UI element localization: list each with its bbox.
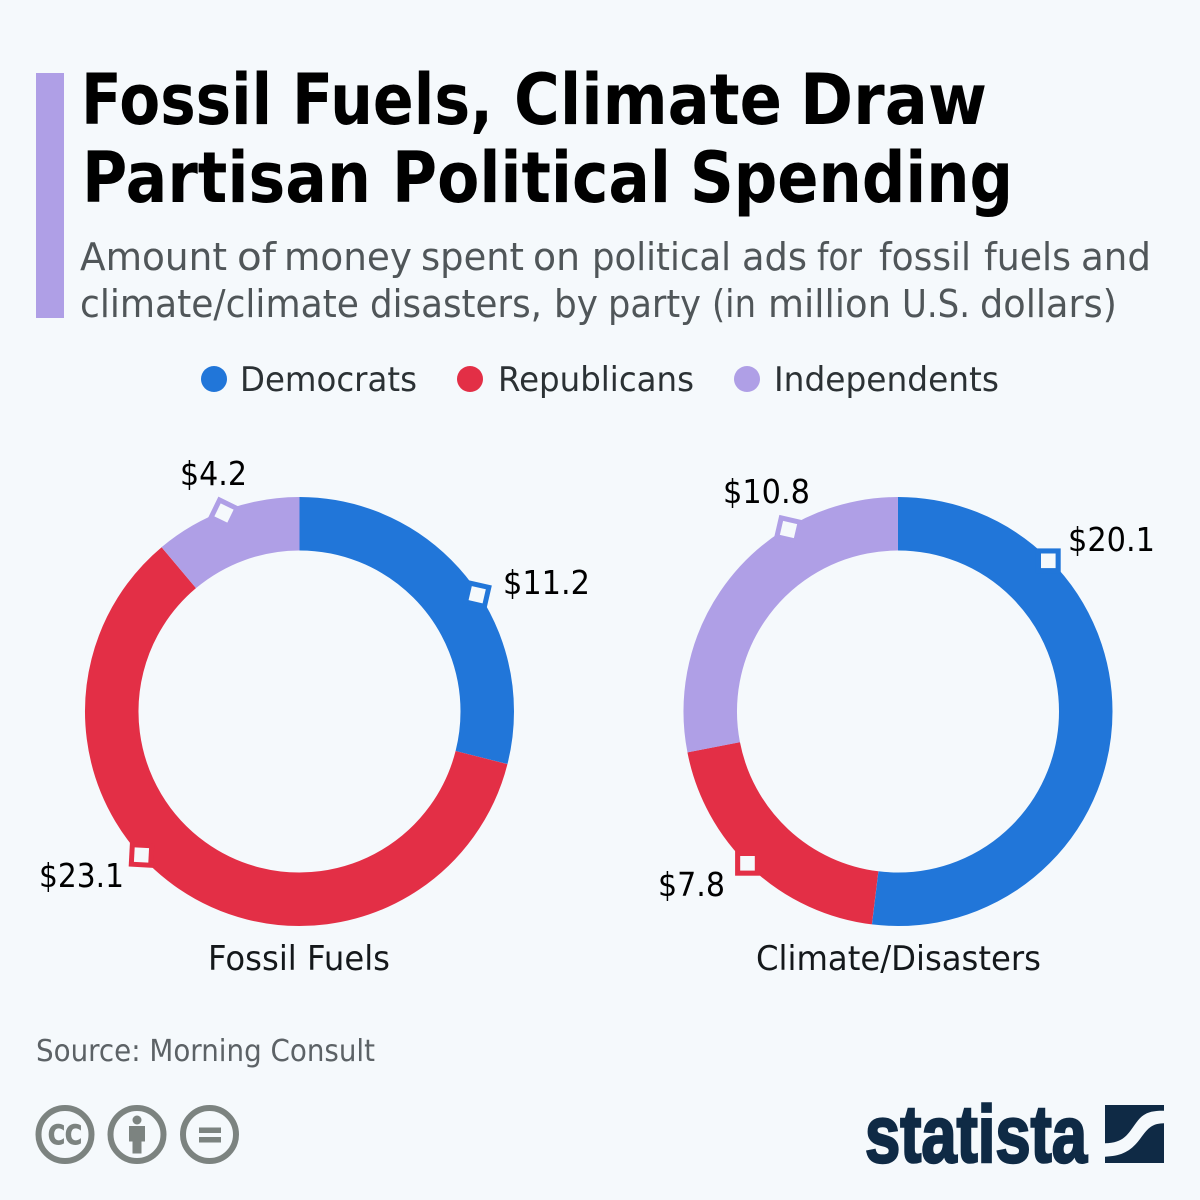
subtitle: political	[592, 235, 731, 279]
subtitle: by	[554, 282, 598, 326]
title: Draw	[800, 59, 987, 141]
legend	[201, 360, 999, 400]
title: Partisan	[82, 137, 371, 219]
subtitle: for	[817, 235, 862, 279]
donut chart: climate/disasters: $20.1	[1068, 520, 1155, 559]
icon: creative commons licence	[38, 1108, 236, 1161]
legend: Republicans	[498, 360, 694, 400]
subtitle: million	[768, 282, 891, 326]
donut chart: fossil fuels	[35, 447, 590, 979]
subtitle: of	[237, 235, 278, 279]
donut chart: climate/disasters: $7.8	[658, 865, 725, 904]
subtitle: on	[533, 235, 580, 279]
subtitle: party	[608, 282, 701, 326]
donut chart: fossil fuels: $11.2	[503, 563, 590, 602]
title	[81, 59, 1013, 219]
subtitle: fuels	[984, 235, 1071, 279]
subtitle	[80, 235, 1151, 326]
donut chart: fossil fuels: $23.1	[39, 856, 124, 895]
icon: creative commons licence: CC	[48, 1120, 82, 1151]
donut chart: climate/disasters	[658, 472, 1155, 979]
subtitle: spent	[421, 235, 524, 279]
subtitle: fossil	[879, 235, 971, 279]
subtitle: Amount	[80, 235, 227, 279]
subtitle: (in	[712, 282, 756, 326]
subtitle: dollars)	[980, 282, 1117, 326]
legend: Independents	[774, 360, 999, 400]
subtitle: disasters,	[370, 282, 542, 326]
subtitle: U.S.	[902, 282, 970, 326]
title: Climate	[514, 59, 782, 141]
source: Source: Morning Consult	[36, 1034, 375, 1069]
title: Political	[392, 137, 671, 219]
donut chart: climate/disasters: $10.8	[723, 472, 810, 511]
donut chart: climate/disasters: Climate/Disasters	[756, 939, 1041, 979]
subtitle: money	[284, 235, 412, 279]
title: Spending	[690, 137, 1013, 219]
donut chart: fossil fuels: $4.2	[180, 454, 247, 493]
title: Fossil	[81, 59, 272, 141]
statista logo: statista	[865, 1090, 1088, 1180]
donut chart: fossil fuels: Fossil Fuels	[208, 939, 390, 979]
subtitle: climate/climate	[80, 282, 359, 326]
subtitle: ads	[742, 235, 807, 279]
title accent bar	[36, 73, 64, 318]
legend: Democrats	[240, 360, 417, 400]
subtitle: and	[1081, 235, 1151, 279]
title: Fuels,	[292, 59, 493, 141]
